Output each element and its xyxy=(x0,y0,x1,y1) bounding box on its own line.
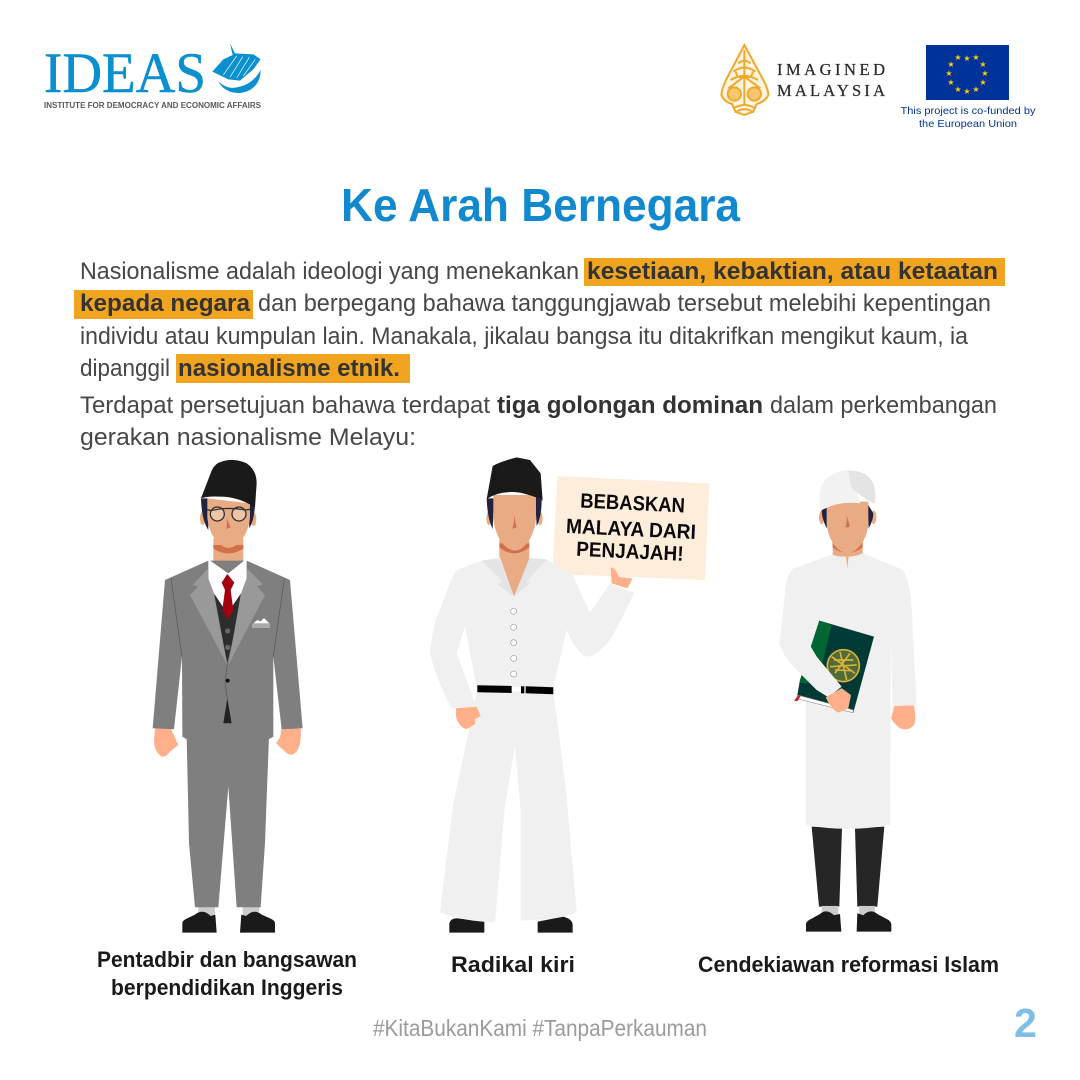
logo: European Union flag: the European Union xyxy=(919,118,1017,130)
icon: IDEAS bird xyxy=(212,43,261,93)
neck xyxy=(213,538,243,567)
shoes and socks xyxy=(182,907,275,933)
logo: Imagined Malaysia: IMAGINED xyxy=(777,60,885,79)
logo: European Union flag: ★ xyxy=(945,69,953,78)
chin shadow xyxy=(499,543,529,553)
logo: European Union flag: ★ xyxy=(954,53,962,62)
shirt buttons xyxy=(511,608,517,677)
jacket xyxy=(153,561,303,739)
logo: European Union flag xyxy=(900,45,1036,130)
left arm xyxy=(779,555,842,697)
neck xyxy=(499,538,529,597)
logo: IDEAS: INSTITUTE FOR DEMOCRACY AND ECONOMIC AFFAIRS xyxy=(44,101,262,110)
right hand xyxy=(891,705,915,729)
paragraph: three dominant groups: tiga golongan dominan xyxy=(497,392,763,419)
robe xyxy=(805,553,917,829)
turban xyxy=(820,470,876,511)
shoes and socks xyxy=(806,906,891,932)
paragraph: nationalism definition: Nasionalisme adalah ideologi yang menekankan xyxy=(80,258,579,285)
logo: European Union flag: ★ xyxy=(947,60,955,69)
caption: radicals: Radikal kiri xyxy=(451,952,575,977)
logo: European Union flag: ★ xyxy=(963,87,971,96)
figure: administrator in grey suit xyxy=(153,460,303,933)
logo: Imagined Malaysia: MALAYSIA xyxy=(777,81,885,100)
logo: European Union flag: ★ xyxy=(981,69,989,78)
book-holding hand xyxy=(826,688,851,713)
trousers xyxy=(812,827,884,907)
placard: MALAYA DARI xyxy=(565,515,696,544)
trousers xyxy=(440,692,577,922)
logo: European Union flag: ★ xyxy=(972,53,980,62)
logo: European Union flag: This project is co-funded by xyxy=(900,105,1036,117)
caption: administrators: Pentadbir dan bangsawan xyxy=(97,947,357,972)
paragraph: nationalism definition: kesetiaan, kebaktian, atau ketaatan xyxy=(587,258,998,285)
trousers xyxy=(187,737,269,907)
figure: left-wing radical with placard xyxy=(430,457,709,933)
paragraph: nationalism definition: kepada negara xyxy=(80,290,250,317)
shirt xyxy=(430,557,634,708)
face xyxy=(207,498,250,548)
logo: European Union flag: ★ xyxy=(963,54,971,63)
paragraph: nationalism definition: nasionalisme etnik. xyxy=(178,355,400,382)
placard xyxy=(552,476,709,580)
hands xyxy=(154,728,301,757)
paragraph: nationalism definition: individu atau kumpulan lain. Manakala, jikalau bangsa itu ditakrifkan mengikut kaum, ia xyxy=(80,323,968,350)
paragraph: three dominant groups: dalam perkembangan xyxy=(770,392,997,419)
face xyxy=(827,502,868,553)
peci hat xyxy=(201,460,257,507)
belt xyxy=(477,685,553,694)
placard: PENJAJAH! xyxy=(576,538,684,566)
logo: European Union flag: ★ xyxy=(972,85,980,94)
placard: BEBASKAN xyxy=(580,490,685,517)
peci hat xyxy=(487,457,543,501)
logo: European Union flag: ★ xyxy=(947,78,955,87)
chin shadow xyxy=(833,542,863,553)
pocket square xyxy=(252,624,270,628)
caption: scholars: Cendekiawan reformasi Islam xyxy=(698,952,999,977)
ears and hair xyxy=(200,498,256,530)
glasses xyxy=(207,507,250,521)
paragraph: three dominant groups: Terdapat persetujuan bahawa terdapat xyxy=(80,392,490,419)
logo: European Union flag: ★ xyxy=(979,60,987,69)
caption: administrators: berpendidikan Inggeris xyxy=(111,975,343,1000)
neck xyxy=(833,538,863,557)
paragraph: nationalism definition: dan berpegang bahawa tanggungjawab tersebut melebihi kepentingan xyxy=(258,290,991,317)
hashtags: #KitaBukanKami #TanpaPerkauman xyxy=(373,1015,707,1041)
logo: IDEAS: IDEAS xyxy=(44,42,206,105)
buttons xyxy=(225,628,230,634)
logo: European Union flag: ★ xyxy=(979,78,987,87)
page number: 2 xyxy=(1014,1000,1037,1046)
face xyxy=(493,495,536,551)
paragraph: nationalism definition xyxy=(74,258,1005,383)
logo: European Union flag: ★ xyxy=(954,85,962,94)
shoes xyxy=(449,917,573,933)
paragraph: three dominant groups xyxy=(80,392,997,451)
raised hand xyxy=(611,567,633,588)
vest xyxy=(214,593,241,663)
lower hand xyxy=(456,707,481,729)
tie xyxy=(222,574,234,619)
caption: administrators xyxy=(97,947,357,1000)
collar xyxy=(482,558,547,597)
logo: Imagined Malaysia xyxy=(721,45,885,115)
lapels xyxy=(190,568,227,665)
shirt xyxy=(208,559,247,623)
ears and hair xyxy=(819,503,876,528)
icon: wayang gold ornament xyxy=(721,45,768,115)
ears and hair xyxy=(486,497,543,529)
title: Ke Arah Bernegara xyxy=(341,179,740,231)
chin shadow xyxy=(213,545,243,553)
figure: Islamic reform scholar with book xyxy=(779,470,917,932)
paragraph: three dominant groups: gerakan nasionalisme Melayu: xyxy=(80,424,416,451)
paragraph: nationalism definition: dipanggil xyxy=(80,355,170,382)
book xyxy=(794,621,874,713)
